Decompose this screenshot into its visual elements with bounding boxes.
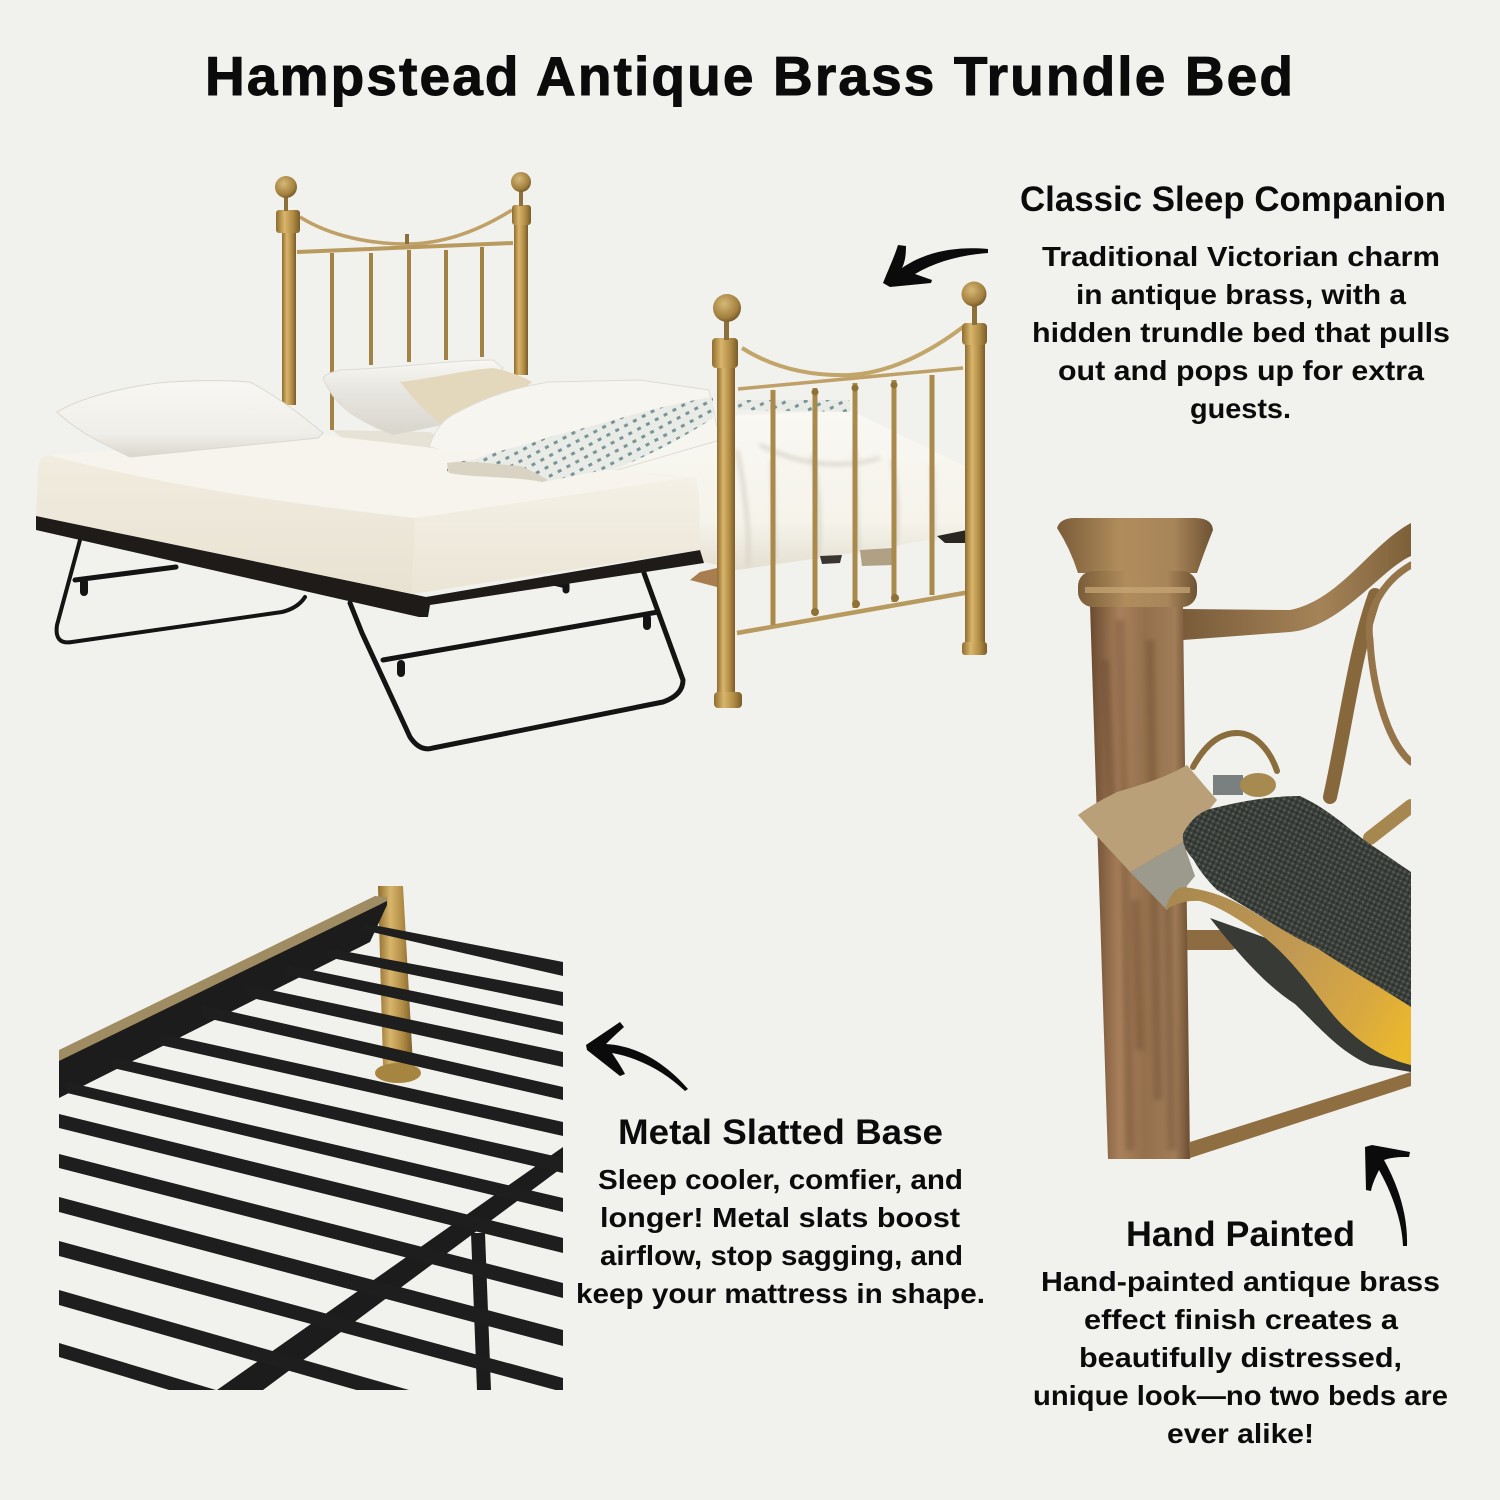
glove wrist [1210,918,1411,1072]
paint brush handle [1165,887,1411,1065]
throw blanket [447,397,713,482]
beige cushion [400,368,532,425]
trundle mattress [36,435,700,594]
text block: hand painted: beautifully distressed, [1079,1342,1402,1373]
text block: hand painted: effect finish creates a [1084,1304,1398,1335]
comforter roll over pillows [429,380,720,470]
text block: classic sleep companion: in antique brass, with a [1076,279,1406,310]
throw on far side [737,400,850,412]
text block: metal slatted base: keep your mattress in shape. [576,1278,985,1309]
curved arm [1183,523,1411,640]
bed post [375,886,421,1083]
lower bar [1190,1072,1411,1158]
text block: metal slatted base: Sleep cooler, comfier, and [598,1164,963,1195]
footboard [712,282,987,708]
paint brush bristles [1078,765,1217,872]
centre support [217,1147,563,1390]
front pillow [57,381,323,457]
text block: classic sleep companion: hidden trundle bed that pulls [1032,317,1450,348]
arrow: to paint photo [1365,1145,1410,1246]
heading: hand painted: Hand Painted [1126,1215,1355,1254]
text block: metal slatted base [576,1164,985,1309]
text block: metal slatted base: longer! Metal slats boost [600,1202,960,1233]
text block: hand painted [1033,1266,1448,1449]
photo: metal slatted base [59,886,563,1390]
heading: metal slatted base: Metal Slatted Base [618,1113,943,1152]
title: Hampstead Antique Brass Trundle Bed [205,45,1293,107]
trundle frame [36,515,704,617]
text block: hand painted: Hand-painted antique brass [1041,1266,1440,1297]
heading: classic sleep companion: Classic Sleep Companion [1020,180,1446,219]
paint brush ferrule [1130,842,1195,910]
metal clasp behind brush [1213,773,1276,797]
headboard [275,172,531,430]
text block: classic sleep companion: out and pops up for extra [1058,355,1424,386]
gloved hand [1183,796,1411,1020]
headboard scrollwork [1188,565,1411,940]
slats [59,926,563,1390]
illustration: trundle bed [36,172,987,749]
arrow: to slatted base [586,1022,688,1091]
back pillow [323,360,503,435]
side rail [59,896,387,1098]
post [1090,605,1190,1159]
trundle legs [57,540,683,749]
text block: hand painted: unique look—no two beds are [1033,1380,1448,1411]
main mattress and comforter [332,410,967,587]
text block: metal slatted base: airflow, stop sagging, and [600,1240,963,1271]
text block: classic sleep companion [1032,241,1450,424]
throw fringe [447,462,548,482]
text block: classic sleep companion: Traditional Victorian charm [1042,241,1440,272]
photo: hand painting the brass post [1057,518,1411,1159]
text block: classic sleep companion: guests. [1190,393,1291,424]
text block: hand painted: ever alike! [1167,1418,1314,1449]
post cap [1057,518,1213,607]
arrow: to bed [883,245,988,287]
